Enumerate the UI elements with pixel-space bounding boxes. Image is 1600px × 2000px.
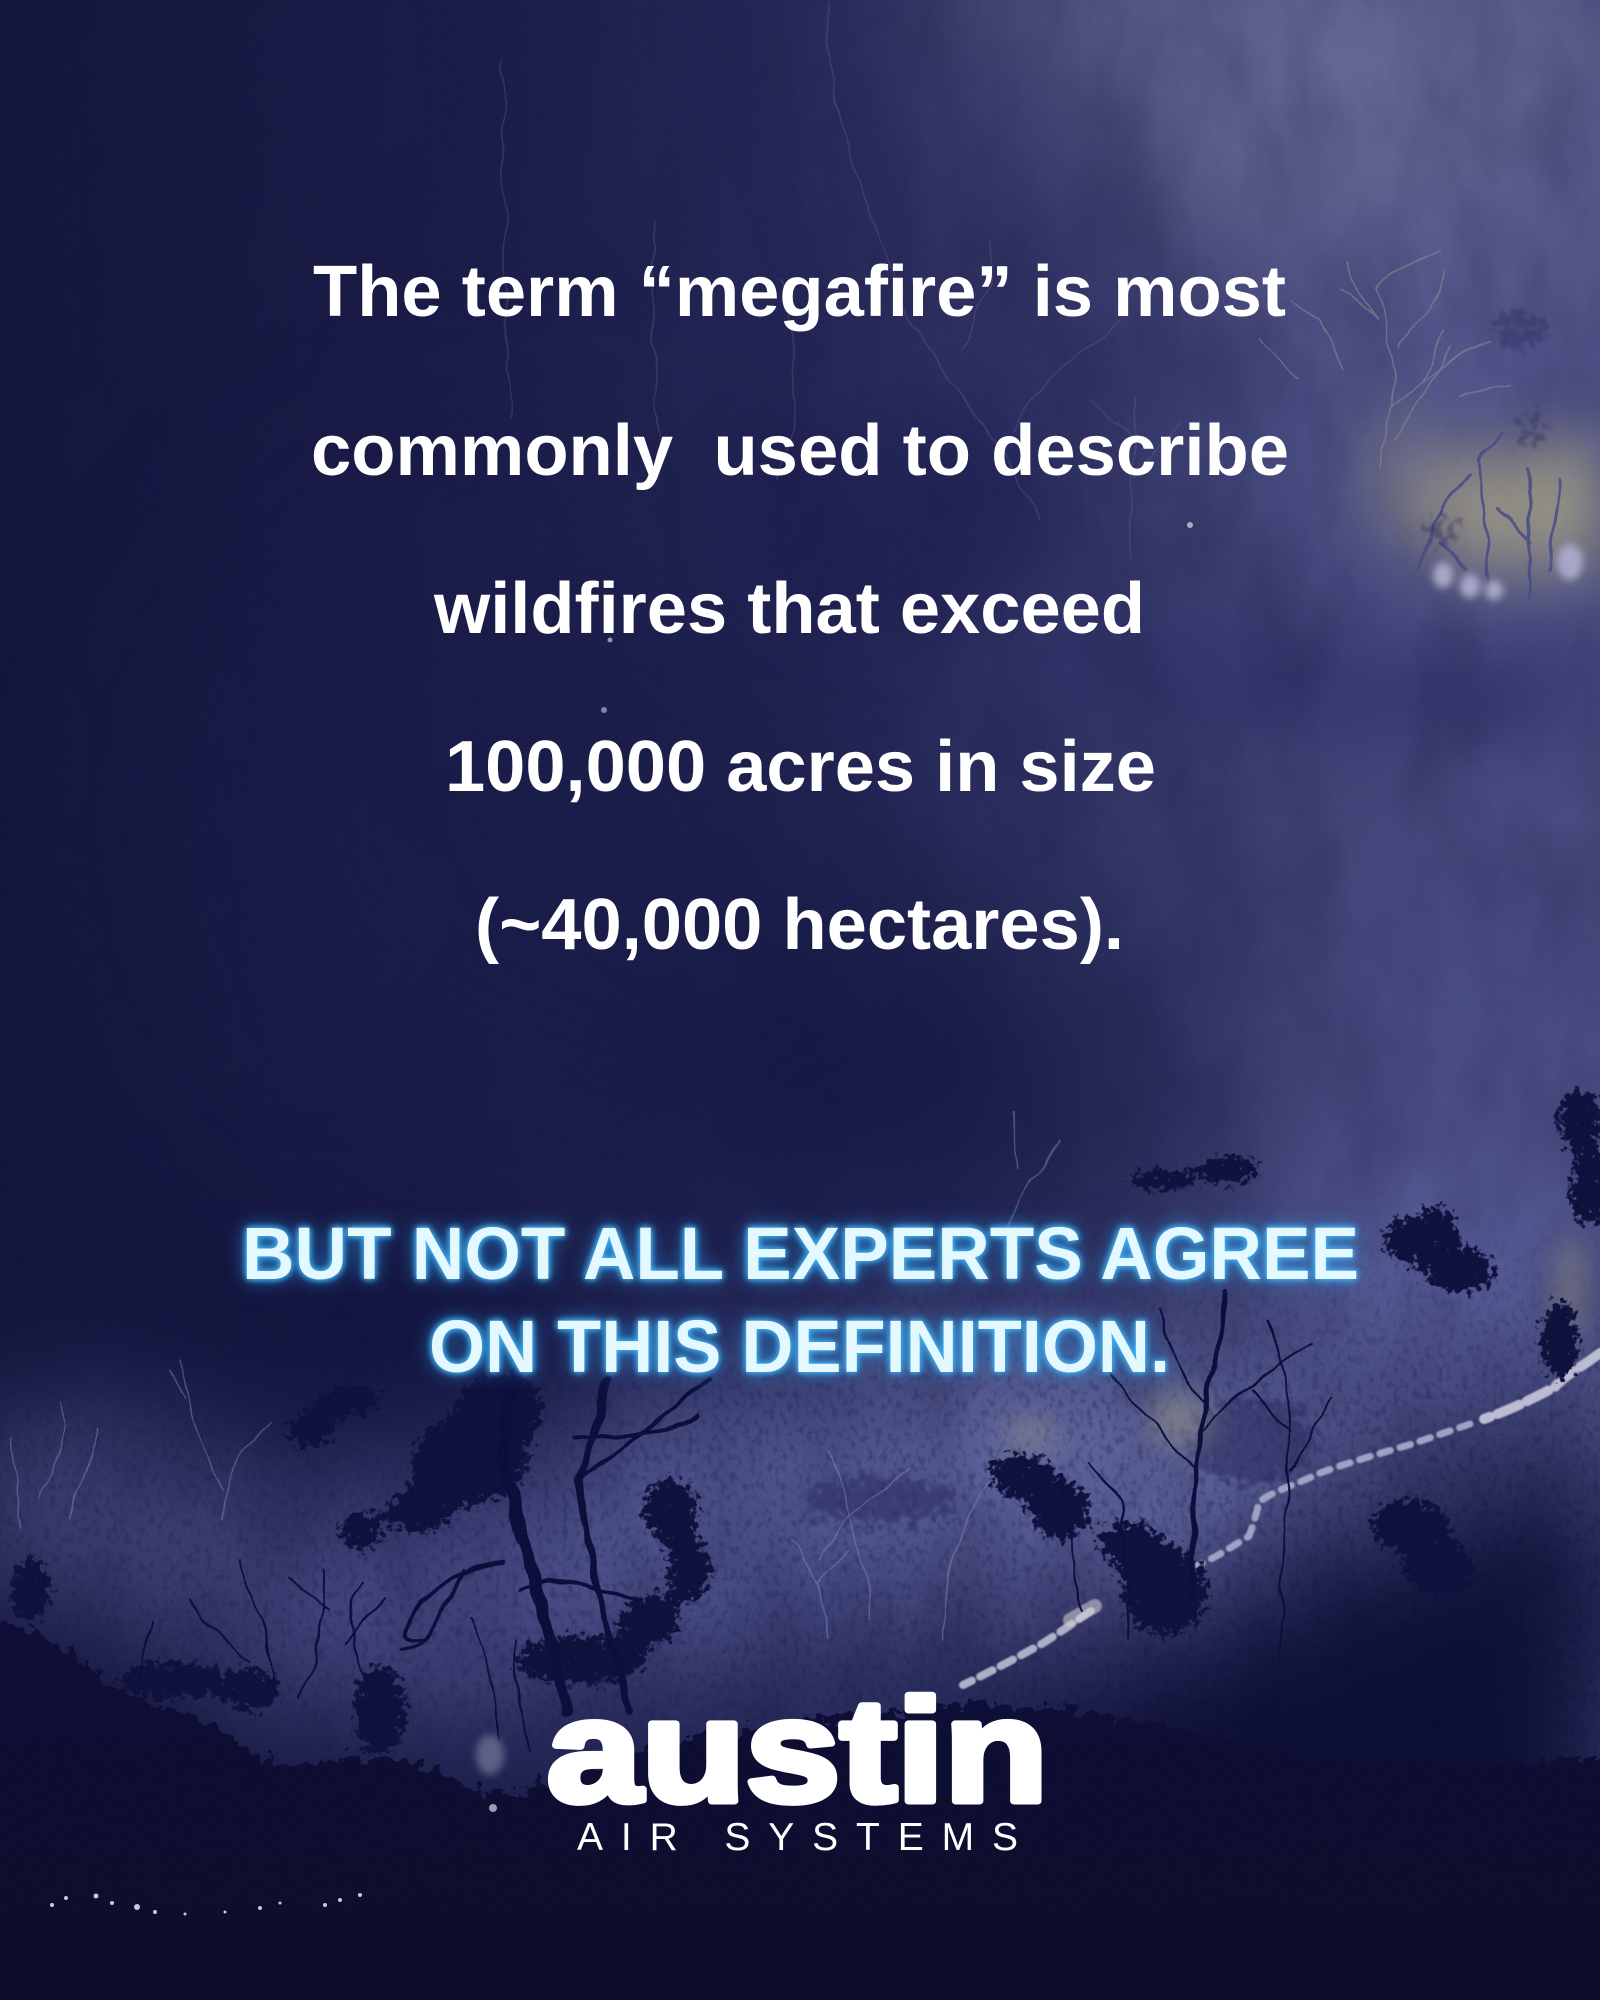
line 1: The term “megafire” is most [313, 252, 1286, 332]
left and centre hill silhouette [0, 1620, 1600, 2000]
distant hazy trees, upper [500, 0, 1180, 560]
small glowing embers, lower left [50, 1804, 497, 1916]
line 5: (~40,000 hectares). [475, 885, 1124, 965]
logo wordmark: austin [547, 1669, 1048, 1832]
line 4: 100,000 acres in size [445, 727, 1156, 807]
line 3: wildfires that exceed [433, 569, 1145, 649]
definition text block [311, 252, 1289, 965]
line 2: commonly used to describe [311, 411, 1289, 491]
fire line [963, 1353, 1600, 1685]
pale smoke-lit branches [10, 1110, 1060, 1640]
glowing callout [242, 1212, 1359, 1388]
fire glow, upper right [1260, 250, 1600, 600]
right slope dark fade [900, 1470, 1600, 2000]
distant foliage [790, 1390, 1320, 1530]
logo tagline: AIR SYSTEMS [577, 1816, 1018, 1859]
mottled mid-ground foliage [9, 1251, 1600, 1712]
dark foliage clusters [6, 1085, 1600, 1760]
logo: austin air systems [547, 1669, 1048, 1859]
callout line 1: BUT NOT ALL EXPERTS AGREE [242, 1212, 1359, 1295]
bare dark trees [140, 1290, 1330, 1750]
callout line 2: ON THIS DEFINITION. [429, 1305, 1170, 1388]
hazy ridge below the upper fire [730, 50, 1600, 744]
